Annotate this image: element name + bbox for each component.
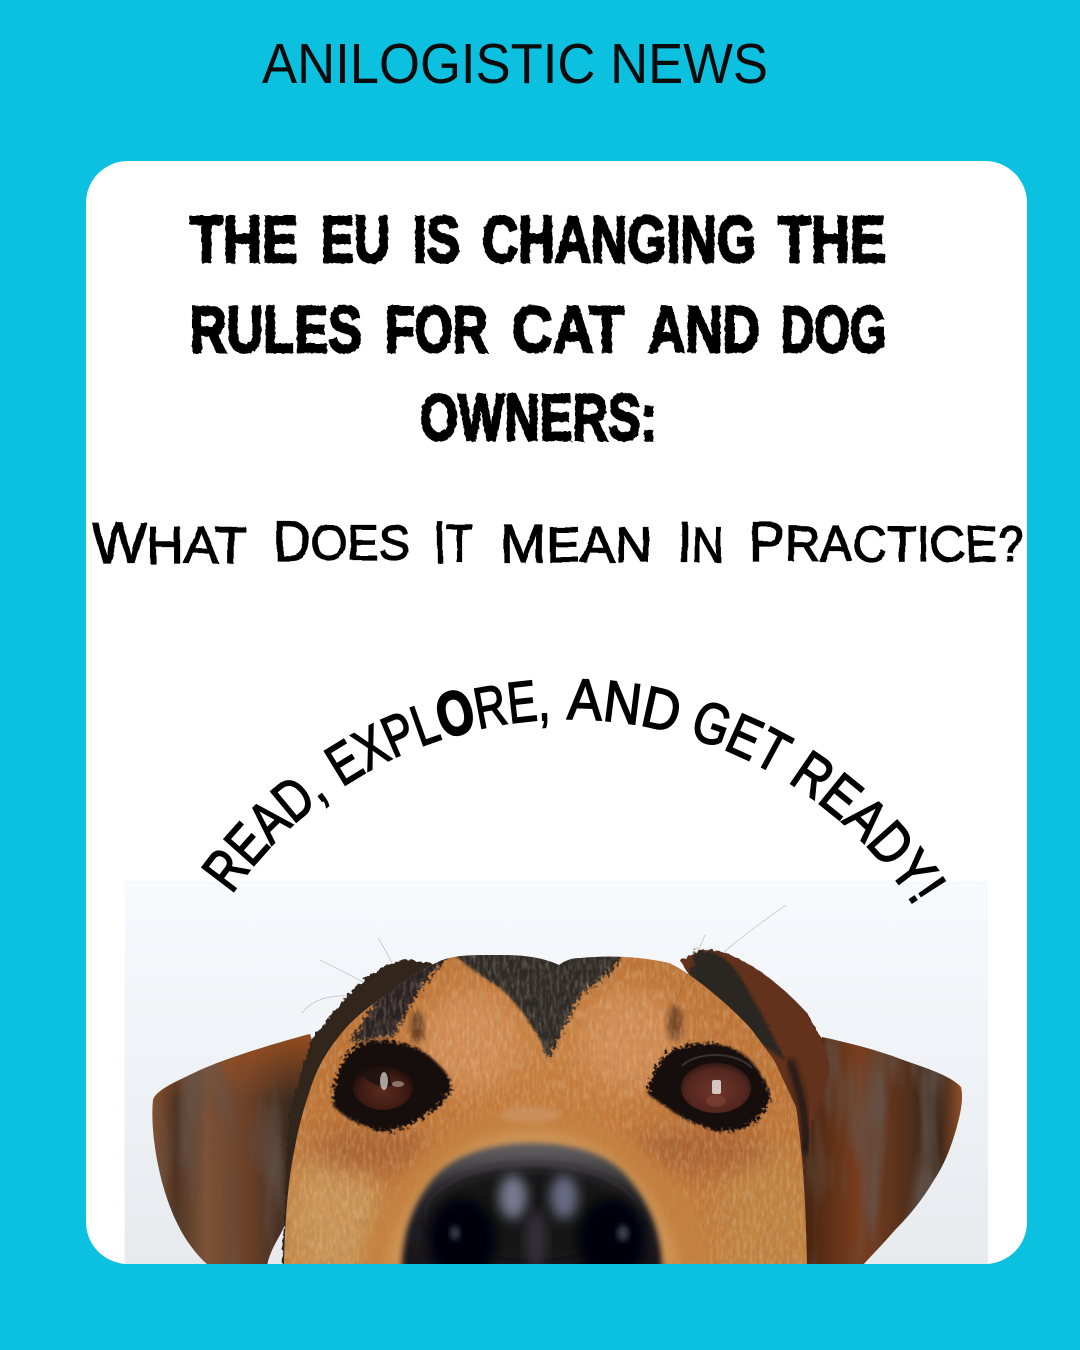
face base (284, 955, 807, 1264)
face bright forehead (420, 990, 520, 1090)
under-eye shade (630, 1128, 770, 1172)
icon: right flap dark seam (790, 1060, 806, 1155)
subheading: MEAN (500, 514, 652, 574)
heading (190, 202, 886, 454)
heading: IS (413, 202, 460, 276)
panel: white card (86, 161, 1027, 1264)
dog photo (124, 881, 988, 1285)
masthead title: ANILOGISTIC NEWS (262, 32, 768, 96)
photo backdrop (124, 881, 988, 1264)
curved tagline: GET (694, 702, 795, 770)
nose body (402, 1143, 662, 1270)
lower shine (706, 1095, 726, 1107)
brow shade left (350, 955, 450, 1042)
nose highlight left lobe (499, 1175, 527, 1219)
curved tagline: EXPLORE, (323, 680, 548, 786)
dark blaze (449, 950, 625, 1060)
icon: left ear (152, 1034, 312, 1264)
brow mark right (667, 1005, 683, 1041)
left nostril (428, 1198, 496, 1282)
iris (681, 1063, 751, 1113)
left ear streaks (152, 1060, 284, 1264)
heading: THE (778, 202, 886, 276)
heading: EU (321, 202, 390, 276)
fur texture light (280, 950, 810, 1270)
heading: THE (190, 202, 298, 276)
face lower right cheek (736, 1164, 806, 1242)
icon: right eye (681, 1055, 752, 1113)
nose ring (385, 1130, 680, 1266)
snout highlight (500, 1107, 560, 1123)
subheading: IT (433, 510, 473, 575)
icon: right flap dark upper (690, 951, 785, 1060)
heading: AND (648, 292, 760, 366)
iris (353, 1064, 413, 1110)
subheading (92, 509, 1024, 576)
face bright forehead right (580, 990, 680, 1090)
curved tagline: READ, (200, 780, 330, 893)
infographic canvas (86, 44, 1027, 1264)
catchlight small (392, 1081, 404, 1087)
curved tagline: AND (566, 678, 680, 730)
heading: CHANGING (482, 202, 756, 276)
nose highlight right lobe (550, 1175, 578, 1219)
nose dark mid (427, 1167, 637, 1263)
fur texture dark (280, 950, 810, 1270)
whiskers (302, 905, 786, 1040)
curved tagline (200, 678, 946, 904)
pupil shine (362, 1069, 392, 1087)
right nostril (578, 1198, 646, 1282)
lid highlight (682, 1055, 752, 1068)
left ear base (152, 1034, 312, 1264)
icon: face (284, 955, 807, 1264)
face lower left cheek (284, 1154, 383, 1264)
icon: left head flap (282, 959, 440, 1266)
right ear streaks (804, 1038, 946, 1264)
left ear top warm tone (166, 1034, 312, 1094)
icon: right head flap (680, 950, 829, 1266)
under-eye shade left (310, 1128, 430, 1172)
left nostril glint (450, 1226, 460, 1240)
subheading: WHAT (92, 511, 246, 576)
nose bridge shine (526, 1210, 546, 1270)
heading: OWNERS: (420, 380, 657, 454)
icon: right eye patch (647, 1043, 771, 1131)
icon: nose (402, 1143, 662, 1282)
brow mark left (410, 1011, 424, 1043)
curved tagline: READY! (790, 750, 946, 904)
subheading: PRACTICE? (749, 510, 1024, 573)
right nostril glint (617, 1225, 629, 1241)
icon: left eye patch (333, 1041, 451, 1131)
heading: CAT (512, 292, 624, 366)
heading: FOR (385, 292, 488, 366)
subheading: IN (677, 510, 724, 575)
heading: DOG (781, 292, 886, 366)
icon: right ear (802, 1037, 962, 1264)
snout bridge (360, 1108, 712, 1270)
catchlight (380, 1072, 388, 1090)
subheading: DOES (273, 509, 410, 572)
heading: RULES (190, 292, 362, 366)
icon: left eye (353, 1064, 413, 1110)
catchlight (712, 1080, 721, 1094)
right ear base (802, 1037, 962, 1264)
